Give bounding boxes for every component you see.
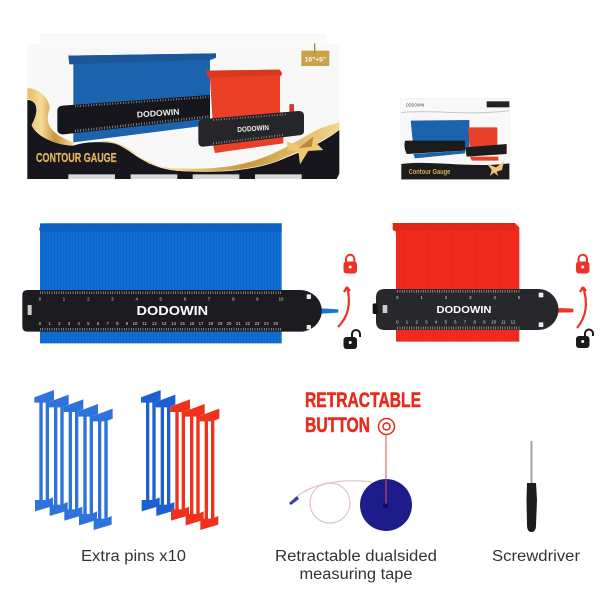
callout: retractable button — [305, 389, 421, 437]
black ruler: 5 — [518, 295, 521, 300]
black ruler: 12 — [152, 321, 157, 326]
small black ruler in box — [198, 111, 304, 147]
tape tip — [289, 496, 299, 505]
black ruler: 12 — [511, 319, 516, 324]
black ruler: 1 — [406, 319, 409, 324]
blue pin — [317, 308, 338, 314]
black ruler: 23 — [255, 321, 260, 326]
callout: retractable button: BUTTON — [305, 414, 370, 437]
small box wavy line — [401, 111, 509, 113]
icon: open lock — [576, 330, 593, 348]
black ruler: 7 — [464, 319, 467, 324]
black ruler: 9 — [126, 321, 129, 326]
gold ribbon: left loop — [27, 88, 73, 146]
black ruler: 16 — [190, 321, 195, 326]
black ruler: 9 — [483, 319, 486, 324]
box black band — [27, 100, 339, 179]
black ruler: 3 — [469, 295, 472, 300]
black ruler: 13 — [162, 321, 167, 326]
black ruler: 4 — [435, 319, 438, 324]
product box: small — [401, 98, 510, 180]
caption: measuring tape: Retractable dualsided — [275, 548, 437, 565]
icon: target — [378, 418, 394, 434]
caption: measuring tape — [275, 548, 437, 583]
small box tag — [487, 101, 509, 107]
black ruler: 1 — [63, 296, 66, 301]
black ruler: 9 — [256, 296, 259, 301]
black ruler: 11 — [142, 321, 148, 326]
screwdriver — [526, 441, 537, 532]
black ruler: 8 — [232, 296, 235, 301]
black ruler: 0 — [396, 295, 399, 300]
small gold badge: 10"+5" — [305, 57, 326, 64]
caption: measuring tape: measuring tape — [300, 566, 412, 583]
black ruler: 2 — [415, 319, 418, 324]
black ruler — [373, 289, 558, 330]
black ruler: 4 — [77, 321, 80, 326]
black ruler: 4 — [493, 295, 496, 300]
black ruler: 5 — [87, 321, 90, 326]
black ruler: 3 — [111, 296, 114, 301]
red gauge body — [393, 223, 519, 342]
black ruler: 21 — [236, 321, 241, 326]
small box bow — [487, 161, 504, 176]
black ruler: 1 — [48, 321, 51, 326]
black ruler: 20 — [227, 321, 232, 326]
black ruler: 3 — [425, 319, 428, 324]
small black ruler in box: DODOWIN — [237, 123, 269, 134]
small gold badge — [301, 43, 329, 66]
tape loop — [294, 481, 372, 523]
black ruler: DODOWIN — [136, 303, 208, 318]
black ruler: 10 — [279, 296, 284, 301]
black ruler in box: DODOWIN — [136, 107, 180, 119]
gold bow — [287, 131, 323, 164]
black ruler: 14 — [171, 321, 177, 326]
small box gauges — [404, 120, 507, 161]
black ruler: 2 — [445, 295, 448, 300]
black ruler: 8 — [116, 321, 119, 326]
black ruler: 8 — [473, 319, 476, 324]
black ruler: 5 — [159, 296, 162, 301]
lock indicator: red gauge — [576, 255, 593, 348]
red pin — [557, 308, 573, 313]
lock indicator: blue gauge — [338, 255, 360, 349]
black ruler: DODOWIN — [436, 305, 491, 316]
extra pins: mixed set — [141, 390, 219, 530]
black ruler: 18 — [208, 321, 214, 326]
measuring tape — [289, 434, 412, 531]
large blue gauge — [22, 223, 338, 343]
icon: open lock — [344, 330, 360, 349]
black ruler: 10 — [491, 319, 497, 324]
black ruler: 7 — [208, 296, 211, 301]
icon: closed lock — [576, 255, 590, 274]
black ruler: 1 — [420, 295, 423, 300]
small box logo: DODOWIN — [406, 103, 424, 108]
black ruler: 15 — [180, 321, 185, 326]
blue gauge in box — [68, 53, 216, 142]
blue gauge body — [39, 223, 282, 343]
black ruler: 11 — [501, 319, 506, 324]
black ruler: 0 — [396, 319, 399, 324]
callout: retractable button: RETRACTABLE — [305, 389, 421, 412]
black ruler: 0 — [39, 321, 42, 326]
black ruler in box — [57, 95, 210, 134]
box title: CONTOUR GAUGE — [36, 151, 117, 165]
black ruler: 25 — [273, 321, 279, 326]
tape disc — [360, 479, 412, 531]
pointer line — [385, 434, 387, 504]
arrow: lock direction — [577, 287, 586, 328]
small box title: Contour Gauge — [409, 169, 450, 176]
small box black band — [401, 163, 509, 179]
black ruler: 2 — [58, 321, 61, 326]
black ruler: 6 — [97, 321, 100, 326]
black ruler: 22 — [245, 321, 251, 326]
black ruler: 2 — [87, 296, 90, 301]
black ruler — [22, 290, 322, 332]
extra pins: blue set — [34, 390, 113, 530]
black ruler: 0 — [39, 296, 42, 301]
black ruler: 5 — [444, 319, 447, 324]
black ruler: 19 — [218, 321, 223, 326]
caption: screwdriver: Screwdriver — [492, 548, 580, 565]
large red gauge — [373, 223, 573, 342]
black ruler: 17 — [199, 321, 204, 326]
red gauge in box — [207, 70, 294, 153]
box bottom tabs — [68, 174, 302, 179]
black ruler: 6 — [184, 296, 187, 301]
arrow: lock direction — [338, 287, 350, 327]
black ruler: 10 — [133, 321, 138, 326]
icon: closed lock — [344, 255, 357, 274]
product box: large — [27, 33, 339, 179]
gold ribbon: sweep — [100, 122, 339, 172]
box white face — [27, 44, 339, 174]
black ruler: 3 — [68, 321, 71, 326]
black ruler: 6 — [454, 319, 457, 324]
black ruler: 7 — [106, 321, 109, 326]
black ruler: 24 — [264, 321, 269, 326]
black ruler: 4 — [135, 296, 138, 301]
caption: extra pins: Extra pins x10 — [81, 548, 186, 565]
